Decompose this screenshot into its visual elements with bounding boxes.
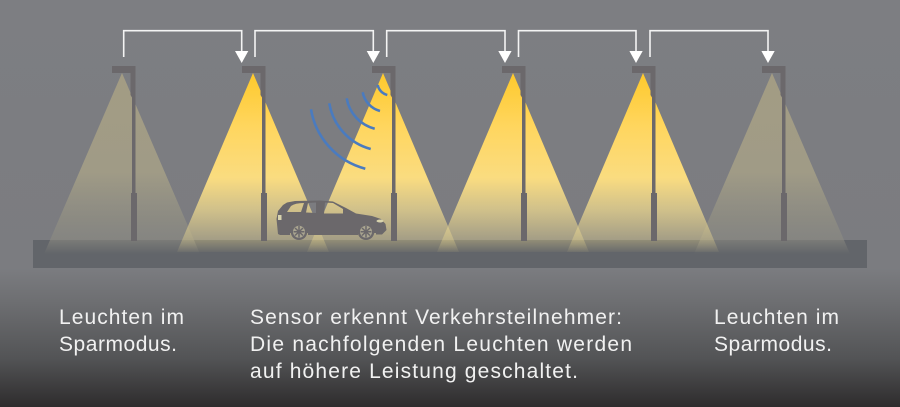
arrows between lamps	[124, 31, 775, 63]
caption: centre: Die nachfolgenden Leuchten werden	[250, 333, 632, 356]
car lights	[278, 215, 384, 222]
lamp 5	[632, 66, 657, 241]
caption: left	[59, 306, 184, 356]
caption: left: Leuchten im	[59, 306, 184, 329]
car	[276, 200, 386, 240]
lamp 2	[242, 66, 267, 241]
caption: centre: auf höhere Leistung geschaltet.	[250, 360, 578, 383]
lamp 1	[112, 66, 137, 241]
rear wheel	[291, 223, 307, 240]
arrow 1	[124, 31, 248, 63]
front wheel	[358, 223, 374, 240]
lamp 6	[762, 66, 787, 241]
road	[33, 240, 867, 268]
caption: centre	[250, 306, 632, 383]
caption: right: Leuchten im	[714, 306, 839, 329]
lamp 4	[502, 66, 527, 241]
caption: centre: Sensor erkennt Verkehrsteilnehmer:	[250, 306, 622, 329]
arrow 5	[650, 31, 775, 63]
sensor waves	[311, 85, 387, 169]
caption: right: Sparmodus.	[714, 333, 832, 356]
street lamps	[112, 66, 787, 241]
arrow 4	[518, 31, 643, 63]
arrow 2	[255, 31, 380, 63]
caption: left: Sparmodus.	[59, 333, 177, 356]
light cones	[44, 73, 850, 254]
arrow 3	[387, 31, 512, 63]
lamp 3	[372, 66, 397, 241]
caption: right	[714, 306, 839, 356]
